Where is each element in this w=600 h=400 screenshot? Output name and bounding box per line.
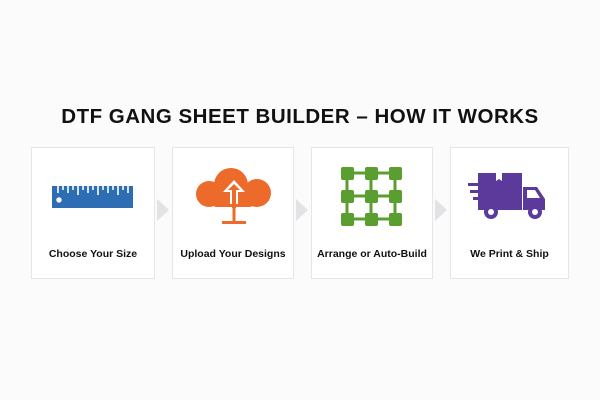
card: arrange: [311, 147, 433, 279]
label: Arrange or Auto-Build: [317, 248, 427, 260]
icon: truck: [468, 173, 545, 219]
card: choose size: [31, 147, 155, 279]
label: Upload Your Designs: [180, 248, 286, 260]
arrow: [157, 199, 169, 221]
title: DTF GANG SHEET BUILDER – HOW IT WORKS: [61, 105, 539, 128]
arrow: [296, 199, 308, 221]
icon: cloud upload: [196, 168, 271, 224]
arrow: [435, 199, 447, 221]
label: Choose Your Size: [49, 248, 137, 260]
card: upload: [172, 147, 294, 279]
label: We Print & Ship: [470, 248, 549, 260]
card: ship: [450, 147, 569, 279]
icon: grid: [341, 167, 402, 226]
icon: ruler: [52, 186, 133, 208]
